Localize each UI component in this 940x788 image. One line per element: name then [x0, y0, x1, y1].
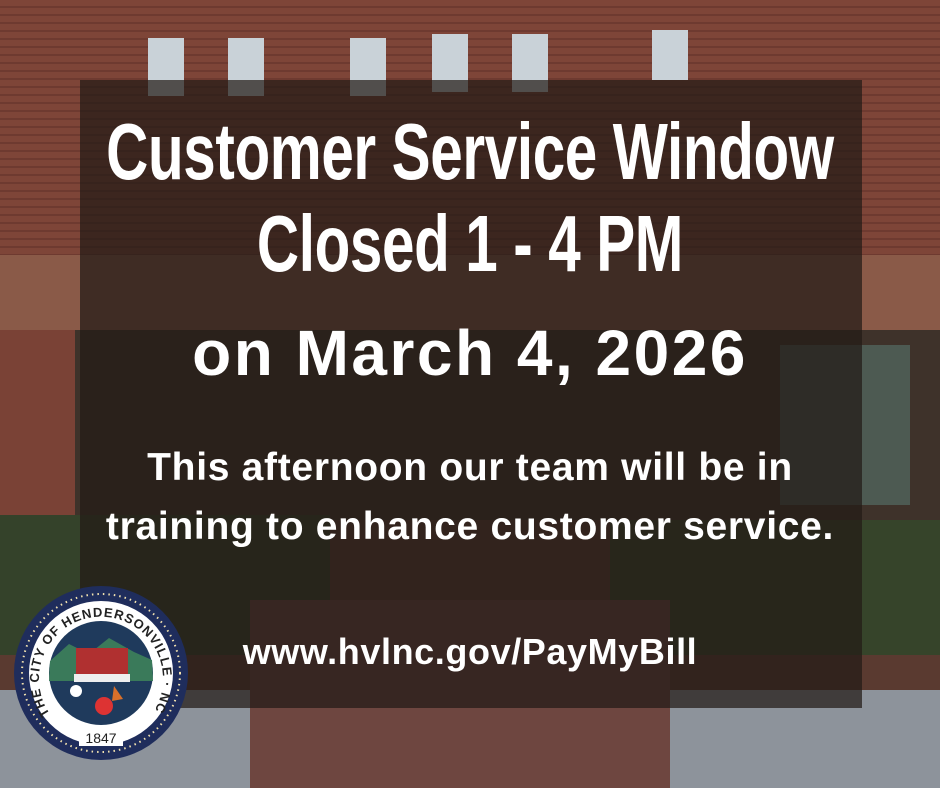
overlay panel [80, 80, 862, 708]
title: Closed 1 - 4 PM [257, 199, 683, 288]
date: on March 4, 2026 [192, 317, 748, 389]
seal: THE CITY OF HENDERSONVILLE · NC [30, 608, 172, 718]
title: Customer Service Window [106, 107, 834, 196]
body text [106, 446, 834, 548]
seal [14, 586, 188, 760]
url: www.hvlnc.gov/PayMyBill [243, 631, 697, 672]
title [106, 107, 834, 288]
seal: 1847 [85, 730, 117, 746]
body text: training to enhance customer service. [106, 505, 834, 548]
body text: This afternoon our team will be in [147, 446, 793, 489]
